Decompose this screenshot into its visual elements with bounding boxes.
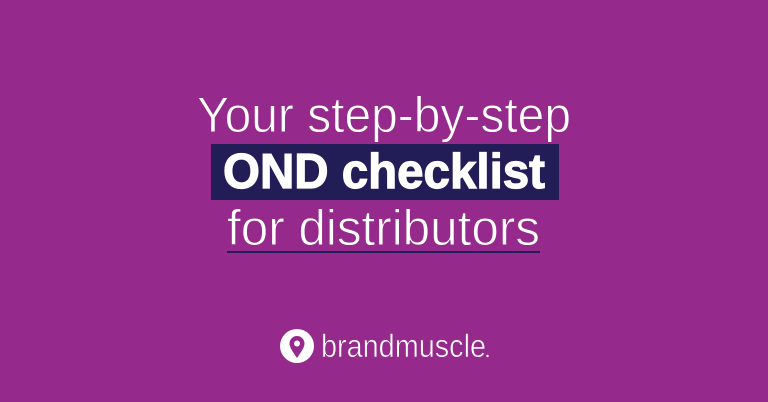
- brandmuscle logo: [280, 328, 489, 364]
- heading line: Your step-by-step: Your step-by-step: [197, 87, 571, 143]
- registered mark dot: [486, 355, 489, 357]
- icon: location pin in circle: [280, 329, 314, 363]
- heading line: for distributors: for distributors: [227, 200, 540, 256]
- highlight box: OND checklist: OND checklist: [223, 145, 545, 199]
- logo wordmark: brandmuscle: [321, 328, 486, 364]
